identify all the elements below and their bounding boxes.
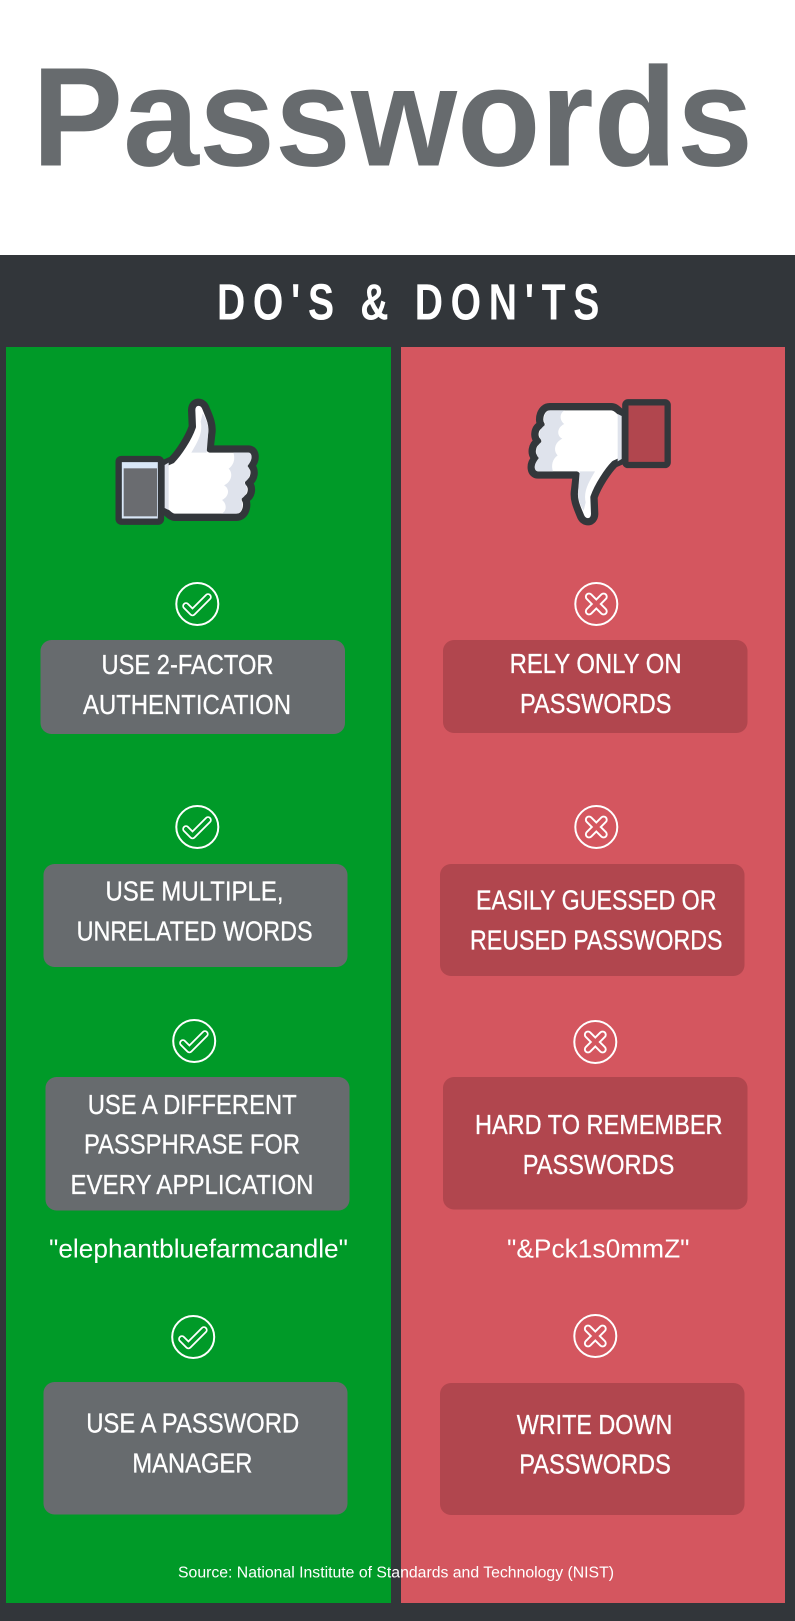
source note: Source: National Institute of Standards and Technology (NIST)	[178, 1564, 614, 1581]
box: rely only on passwords	[443, 640, 748, 733]
icon: check 3	[173, 1020, 215, 1062]
box: write down passwords: WRITE DOWN	[517, 1409, 672, 1440]
panel: do's	[6, 347, 391, 1603]
panel: don'ts	[401, 347, 785, 1603]
box: easily guessed or reused passwords: REUSED PASSWORDS	[470, 925, 722, 956]
icon: thumbs up	[119, 402, 255, 522]
box: use multiple, unrelated words: UNRELATED WORDS	[77, 916, 313, 947]
box: use a different passphrase: USE A DIFFERENT	[88, 1089, 297, 1120]
icon: thumbs down	[531, 402, 668, 522]
box: use 2-factor authentication	[40, 640, 345, 734]
icon: cross 3	[574, 1021, 616, 1063]
box: use a different passphrase	[46, 1077, 350, 1210]
box: use 2-factor authentication: USE 2-FACTOR	[102, 649, 274, 680]
box: use multiple, unrelated words: USE MULTIPLE,	[106, 876, 284, 907]
box: use a password manager	[44, 1382, 348, 1514]
icon: check 4	[172, 1316, 214, 1358]
example passphrase: "elephantbluefarmcandle"	[49, 1233, 348, 1263]
box: hard to remember passwords: HARD TO REMEMBER	[475, 1109, 722, 1140]
subtitle: DO'S & DON'TS	[217, 274, 607, 330]
icon: check 1	[176, 583, 218, 625]
box: easily guessed or reused passwords: EASILY GUESSED OR	[476, 885, 716, 916]
example weak password: "&Pck1s0mmZ"	[507, 1233, 690, 1263]
box: use a password manager: MANAGER	[132, 1448, 252, 1478]
box: use a different passphrase: EVERY APPLICATION	[70, 1169, 314, 1200]
box: write down passwords	[440, 1383, 744, 1515]
icon: cross 2	[575, 806, 617, 848]
box: use a password manager: USE A PASSWORD	[86, 1408, 299, 1438]
box: use multiple, unrelated words	[44, 864, 348, 967]
title: Passwords	[32, 38, 753, 196]
box: rely only on passwords: RELY ONLY ON	[510, 648, 682, 679]
box: hard to remember passwords	[443, 1077, 748, 1210]
box: easily guessed or reused passwords	[440, 864, 744, 976]
icon: cross 4	[574, 1315, 616, 1357]
box: use a different passphrase: PASSPHRASE FOR	[84, 1129, 300, 1160]
box: write down passwords: PASSWORDS	[519, 1449, 671, 1480]
box: use 2-factor authentication: AUTHENTICATION	[83, 689, 291, 720]
icon: cross 1	[575, 583, 617, 625]
box: rely only on passwords: PASSWORDS	[520, 688, 672, 719]
box: hard to remember passwords: PASSWORDS	[523, 1149, 674, 1180]
icon: check 2	[176, 806, 218, 848]
